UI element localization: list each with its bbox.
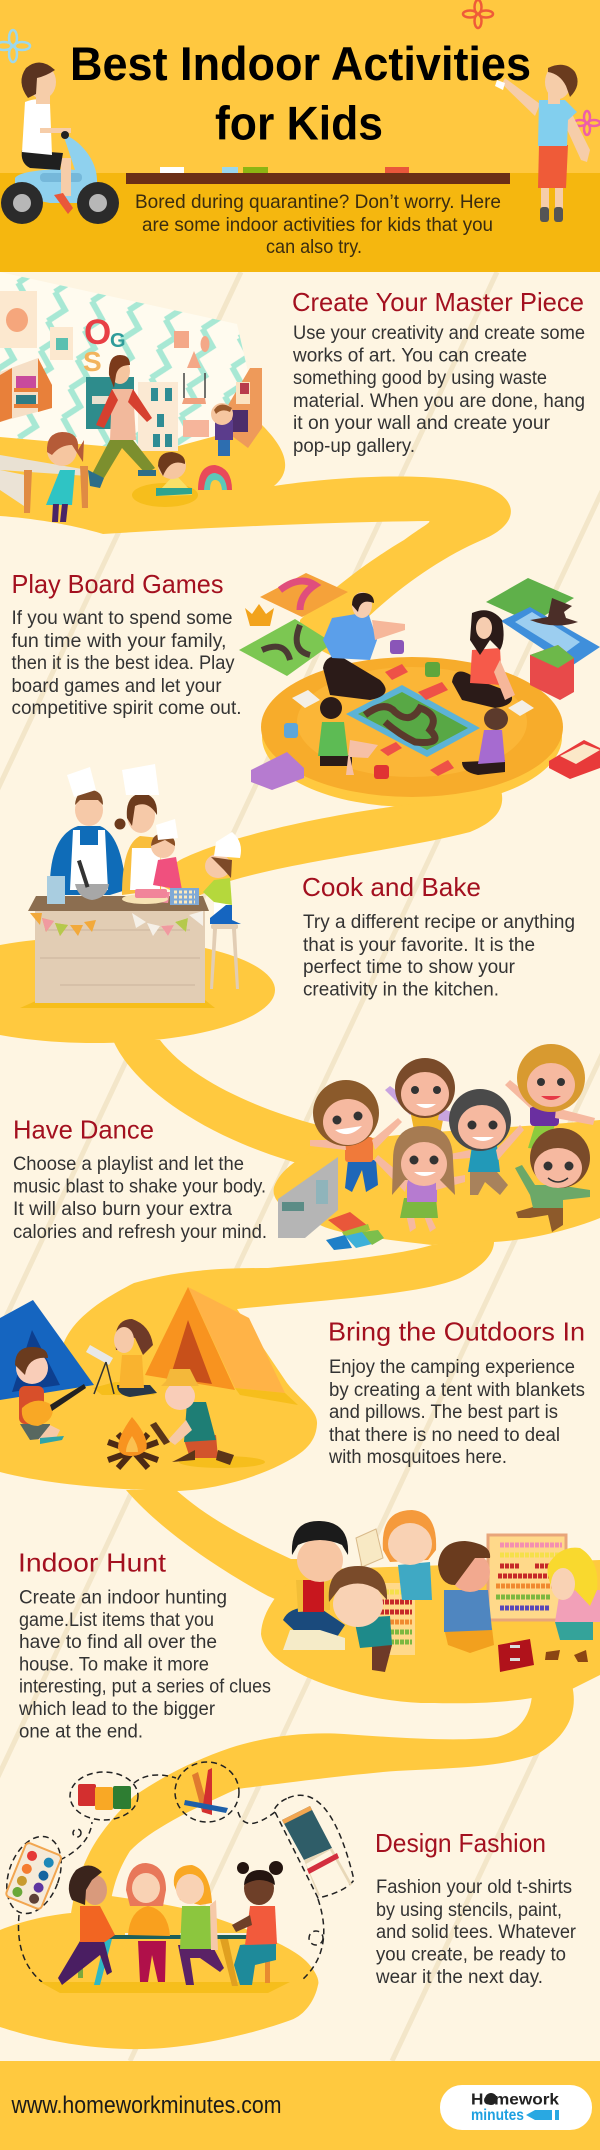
brown-haired boy bbox=[310, 1080, 402, 1192]
son bbox=[318, 697, 378, 775]
game boards bbox=[239, 573, 600, 757]
orange tent bbox=[145, 1287, 298, 1405]
heading and text: Play Board Games: If you want to spend some bbox=[12, 608, 232, 629]
kid: blonde hair bbox=[174, 1865, 224, 1985]
heading and text: Cook and Bake: Cook and Bake bbox=[302, 872, 481, 902]
icon: flowers bbox=[0, 0, 600, 135]
mother chef bbox=[114, 764, 161, 895]
heading and text: Indoor Hunt: house. To make it more bbox=[19, 1654, 209, 1676]
wall art and letters: S bbox=[83, 346, 102, 377]
title: for Kids bbox=[215, 96, 383, 150]
heading and text: Indoor Hunt bbox=[18, 1548, 271, 1742]
shelf with chalk blocks bbox=[126, 167, 510, 184]
boy on scooter bbox=[1, 62, 119, 224]
heading and text: Design Fashion: Fashion your old t-shirts bbox=[376, 1877, 572, 1898]
heading and text: Create Your Master Piece: works of art. You can create bbox=[292, 346, 527, 366]
heading and text: Bring the Outdoors In: that there is no need to deal bbox=[329, 1425, 560, 1446]
heading and text: Cook and Bake: Try a different recipe or anything bbox=[303, 912, 575, 933]
logo: Homework bbox=[471, 2092, 559, 2108]
kitchen counter bbox=[28, 896, 209, 1003]
table bbox=[94, 1933, 253, 1986]
heading and text: Design Fashion: and solid tees. Whatever bbox=[376, 1922, 577, 1943]
heading and text: Indoor Hunt: Create an indoor hunting bbox=[19, 1588, 227, 1608]
winding yellow road bbox=[0, 415, 600, 2049]
boombox bbox=[278, 1157, 338, 1238]
heading and text: Create Your Master Piece: material. When you are done, hang bbox=[293, 391, 585, 412]
curly-haired boy bbox=[438, 1541, 494, 1653]
scene: art room bbox=[0, 272, 262, 522]
heading and text: Cook and Bake: that is your favorite. It is the bbox=[303, 935, 535, 956]
daughter chef bbox=[136, 819, 182, 903]
playroom wall bbox=[0, 272, 260, 451]
heading and text: Play Board Games: then it is the best idea. Play bbox=[12, 653, 235, 674]
small abacus bbox=[377, 1583, 415, 1655]
father bbox=[323, 592, 405, 700]
heading and text: Bring the Outdoors In: with mosquitoes here. bbox=[328, 1447, 507, 1468]
logo: minutes bbox=[471, 2107, 524, 2124]
heading and text: Design Fashion: wear it the next day. bbox=[375, 1967, 543, 1988]
heading and text: Cook and Bake bbox=[302, 872, 575, 1000]
small boy bbox=[211, 403, 233, 456]
game boxes and cups bbox=[251, 640, 600, 790]
footer bbox=[0, 2061, 600, 2150]
right shelf bbox=[224, 368, 262, 448]
intro text bbox=[135, 191, 501, 258]
scene: family board games bbox=[239, 573, 600, 797]
heading and text: Design Fashion: you create, be ready to bbox=[376, 1944, 566, 1966]
intro text: are some indoor activities for kids that you bbox=[142, 214, 493, 236]
map paper bbox=[356, 1529, 383, 1567]
blonde girl bbox=[545, 1548, 600, 1662]
heading and text: Have Dance: music blast to shake your body. bbox=[13, 1176, 266, 1198]
kid: red hair bbox=[126, 1863, 170, 1982]
dashed thought bubbles bbox=[0, 1762, 354, 1982]
heading and text: Have Dance: Choose a playlist and let the bbox=[13, 1154, 244, 1175]
scene: indoor camping bbox=[0, 1287, 298, 1468]
floor shadow bbox=[20, 1000, 215, 1008]
baking items bbox=[47, 860, 199, 905]
heading and text: Design Fashion: by using stencils, paint, bbox=[376, 1900, 562, 1921]
heading and text: Indoor Hunt: have to find all over the bbox=[19, 1632, 217, 1653]
scene: indoor hunt kids bbox=[283, 1510, 600, 1672]
heading and text: Have Dance: It will also burn your extra bbox=[13, 1199, 232, 1220]
title bbox=[70, 37, 531, 150]
boy with guitar bbox=[15, 1347, 86, 1444]
scene: family cooking bbox=[20, 764, 241, 1008]
center girl bbox=[374, 1126, 465, 1232]
heading and text: Create Your Master Piece: pop-up gallery. bbox=[293, 436, 415, 457]
heading and text: Play Board Games bbox=[12, 569, 242, 719]
big abacus bbox=[488, 1535, 566, 1620]
play mat bbox=[261, 657, 563, 797]
heading and text: Bring the Outdoors In: Bring the Outdoors In bbox=[328, 1316, 585, 1346]
top right kid bbox=[505, 1044, 595, 1150]
striped boy bbox=[515, 1128, 590, 1232]
orange-haired girl bbox=[383, 1510, 436, 1600]
books bbox=[326, 1212, 384, 1250]
red bag bbox=[498, 1639, 534, 1672]
heading and text: Indoor Hunt: game.List items that you bbox=[19, 1610, 214, 1631]
stool bbox=[210, 924, 239, 989]
chalkboard bbox=[282, 1806, 352, 1896]
website url: www.homeworkminutes.com bbox=[11, 2092, 281, 2119]
kid: dark skin with buns bbox=[232, 1861, 283, 1985]
son chef bbox=[203, 832, 241, 924]
heading and text: Create Your Master Piece: something good by using waste bbox=[293, 368, 547, 389]
boy drawing on wall bbox=[495, 65, 590, 222]
boy with hat bbox=[150, 1369, 265, 1468]
father chef bbox=[50, 767, 126, 895]
heading and text: Cook and Bake: creativity in the kitchen. bbox=[303, 980, 499, 1000]
teacher bbox=[86, 355, 156, 488]
heading and text: Indoor Hunt: one at the end. bbox=[19, 1722, 143, 1742]
heading and text: Create Your Master Piece: Create Your Master Piece bbox=[292, 287, 584, 317]
wall art and letters: G bbox=[110, 330, 126, 352]
top middle kid bbox=[385, 1058, 470, 1135]
intro text: can also try. bbox=[266, 236, 362, 258]
heading and text: Have Dance: Have Dance bbox=[13, 1114, 154, 1144]
black-haired kid bbox=[445, 1089, 524, 1195]
wall art and letters: O bbox=[84, 313, 111, 352]
floor shadow bbox=[40, 1982, 290, 1993]
girl at table bbox=[0, 432, 88, 522]
mother bbox=[452, 610, 515, 708]
heading and text: Create Your Master Piece: Use your creativity and create some bbox=[293, 323, 585, 344]
icon: pencil bbox=[526, 2110, 559, 2120]
heading and text: Bring the Outdoors In: by creating a tent with blankets bbox=[329, 1380, 585, 1401]
paint jars bbox=[78, 1784, 131, 1810]
wall art and letters bbox=[0, 291, 210, 437]
left shelf bbox=[0, 358, 52, 422]
heading and text: Create Your Master Piece: it on your wall and create your bbox=[293, 413, 551, 434]
heading and text: Cook and Bake: perfect time to show your bbox=[303, 957, 516, 978]
campfire bbox=[108, 1417, 158, 1468]
heading and text: Have Dance: calories and refresh your mind. bbox=[13, 1222, 267, 1243]
heading and text: Design Fashion bbox=[375, 1828, 577, 1988]
title: Best Indoor Activities bbox=[70, 37, 531, 90]
heading and text: Indoor Hunt: Indoor Hunt bbox=[18, 1548, 167, 1578]
brown-haired boy with book bbox=[283, 1566, 392, 1672]
blue tent bbox=[0, 1300, 94, 1400]
kid: curly hair bbox=[58, 1865, 115, 1985]
bunting bbox=[30, 911, 203, 936]
heading and text: Play Board Games: board games and let your bbox=[12, 676, 222, 697]
seated girl and rainbow bbox=[132, 452, 232, 507]
intro text: Bored during quarantine? Don’t worry. Here bbox=[135, 191, 501, 213]
logo bbox=[440, 2085, 592, 2130]
heading and text: Play Board Games: Play Board Games bbox=[12, 569, 224, 599]
heading and text: Have Dance bbox=[13, 1114, 267, 1243]
heading and text: Play Board Games: competitive spirit come out. bbox=[12, 698, 242, 719]
heading and text: Bring the Outdoors In bbox=[328, 1316, 585, 1468]
scene: kids designing bbox=[0, 1762, 354, 1993]
black-haired boy bbox=[283, 1521, 348, 1640]
activity board bbox=[138, 382, 178, 451]
scene: dancing kids bbox=[278, 1044, 595, 1250]
daughter bbox=[462, 708, 508, 775]
heading and text: Create Your Master Piece bbox=[292, 287, 585, 457]
heading and text: Bring the Outdoors In: Enjoy the camping experience bbox=[329, 1357, 575, 1378]
heading and text: Indoor Hunt: interesting, put a series of clues bbox=[19, 1676, 271, 1698]
girl with telescope bbox=[86, 1319, 157, 1397]
heading and text: Design Fashion: Design Fashion bbox=[375, 1828, 546, 1858]
header panel bbox=[0, 0, 600, 272]
heading and text: Indoor Hunt: which lead to the bigger bbox=[18, 1699, 216, 1720]
heading and text: Bring the Outdoors In: and pillows. The best part is bbox=[329, 1402, 558, 1423]
watercolor palette bbox=[5, 1842, 62, 1910]
crayons bbox=[184, 1768, 228, 1815]
heading and text: Play Board Games: fun time with your family, bbox=[12, 631, 227, 652]
